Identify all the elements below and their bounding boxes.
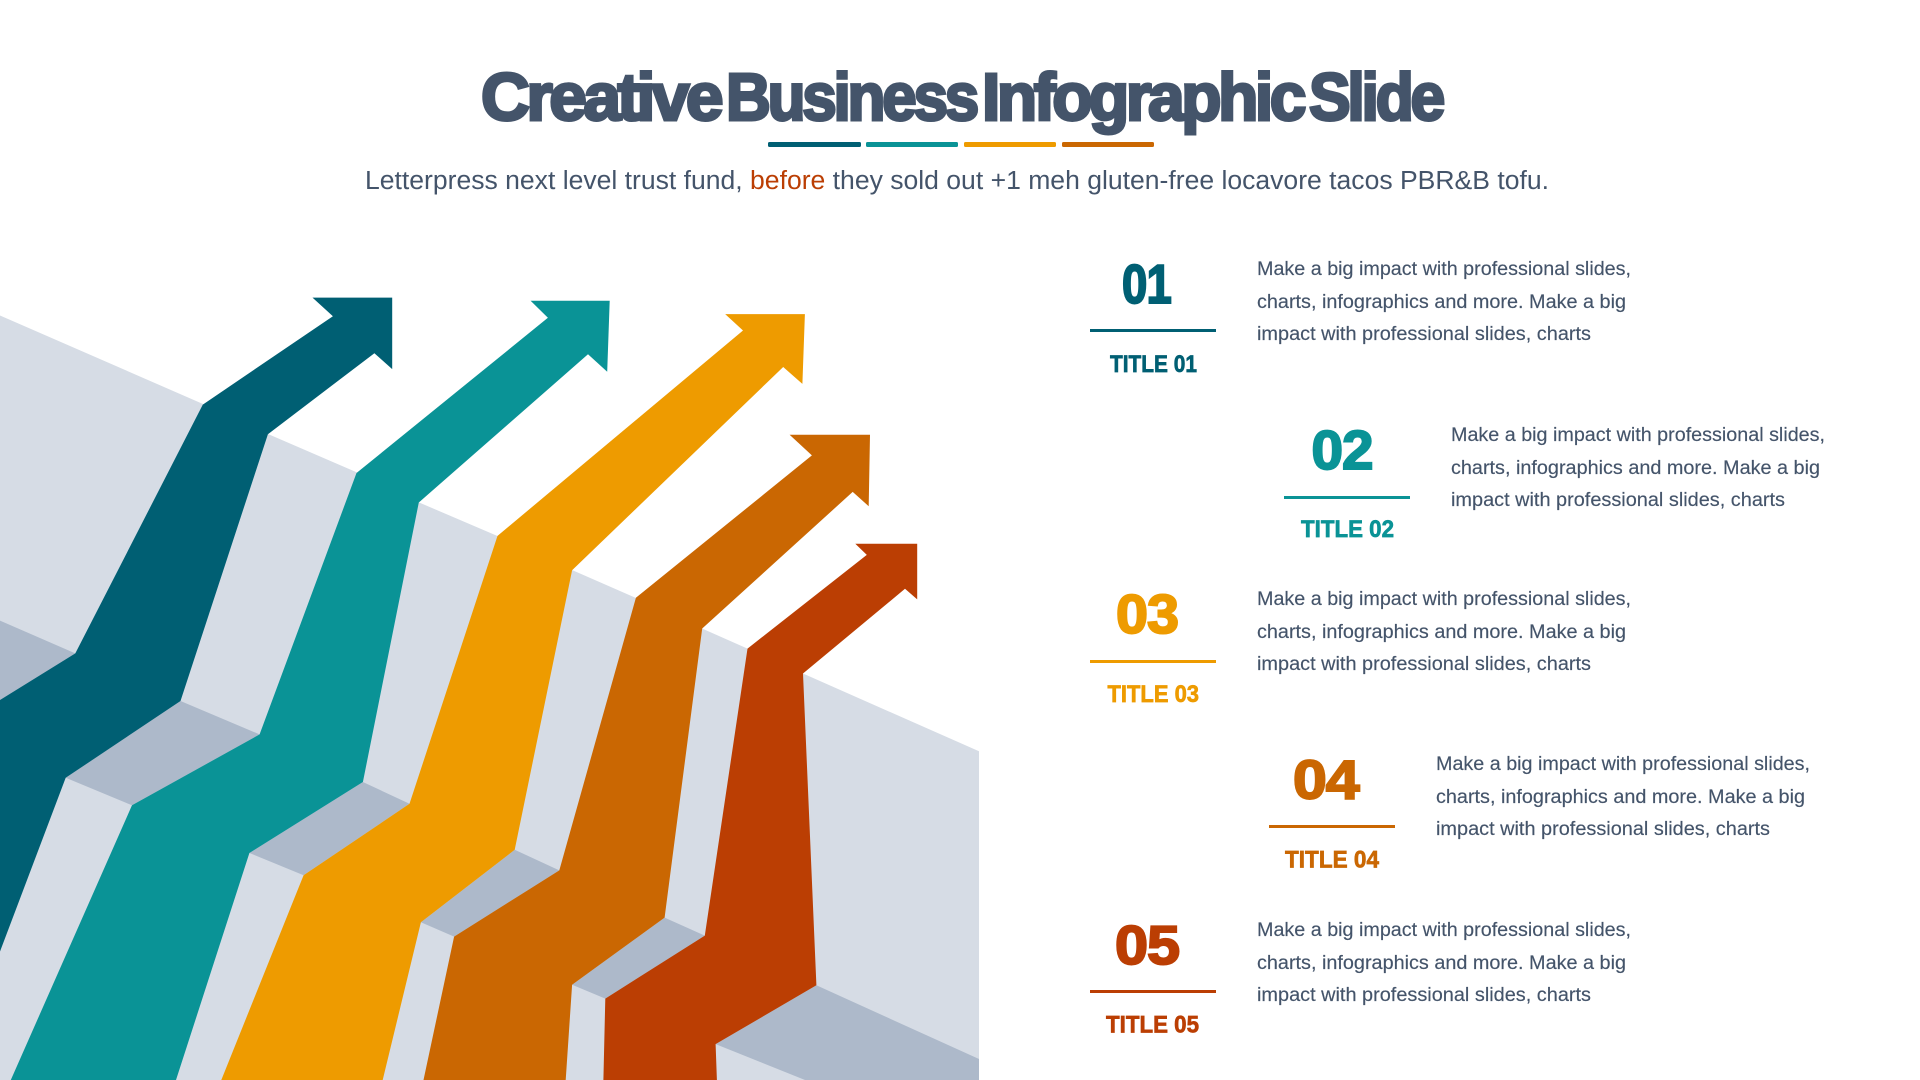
description 01: impact with professional slides, charts — [1257, 324, 1591, 345]
label 02: TITLE 02 — [1301, 516, 1394, 543]
number 01: 01 — [1122, 253, 1171, 315]
arrow 4 — [424, 435, 870, 1080]
description 04 — [1436, 754, 1810, 840]
description 04: charts, infographics and more. Make a big — [1436, 787, 1805, 808]
number 05: 05 — [1115, 914, 1179, 976]
label 04: TITLE 04 — [1285, 846, 1379, 874]
title: Creative — [481, 60, 721, 135]
arrow 5 — [603, 544, 917, 1080]
number 04: 04 — [1293, 748, 1360, 810]
description 01: Make a big impact with professional slides, — [1257, 259, 1631, 280]
description 04: Make a big impact with professional slides, — [1436, 754, 1810, 775]
divider 01 — [1090, 329, 1216, 332]
title: Infographic — [982, 60, 1305, 135]
stair treads — [0, 621, 979, 1080]
title — [481, 60, 1443, 135]
description 05 — [1257, 920, 1631, 1006]
label 01: TITLE 01 — [1110, 351, 1197, 378]
description 02: Make a big impact with professional slides, — [1451, 425, 1825, 446]
number 03: 03 — [1116, 583, 1178, 645]
arrow 2 — [11, 301, 610, 1080]
description 01: charts, infographics and more. Make a big — [1257, 292, 1626, 313]
divider 05 — [1090, 990, 1216, 993]
item 04 — [1269, 748, 1810, 874]
label 03: TITLE 03 — [1108, 681, 1199, 708]
label 05: TITLE 05 — [1106, 1012, 1199, 1038]
number 02: 02 — [1312, 419, 1372, 481]
item 03 — [1090, 583, 1631, 708]
description 01 — [1257, 259, 1631, 345]
item 01 — [1090, 253, 1631, 378]
divider 03 — [1090, 660, 1216, 663]
description 05: impact with professional slides, charts — [1257, 985, 1591, 1006]
title underline bars — [768, 142, 1154, 147]
title: Business — [726, 60, 977, 135]
description 02 — [1451, 425, 1825, 511]
description 04: impact with professional slides, charts — [1436, 819, 1770, 840]
description 03: Make a big impact with professional slides, — [1257, 589, 1631, 610]
stair wall — [0, 316, 979, 1080]
description 02: charts, infographics and more. Make a big — [1451, 458, 1820, 479]
divider 04 — [1269, 825, 1395, 828]
arrow 1 — [0, 298, 392, 952]
description 05: Make a big impact with professional slides, — [1257, 920, 1631, 941]
description 05: charts, infographics and more. Make a big — [1257, 953, 1626, 974]
description 03: impact with professional slides, charts — [1257, 654, 1591, 675]
title: Slide — [1309, 60, 1443, 135]
subtitle: Letterpress next level trust fund, before they sold out +1 meh gluten-free locavore tacos PBR&B tofu. — [365, 167, 1549, 195]
description 02: impact with professional slides, charts — [1451, 490, 1785, 511]
item 05 — [1090, 914, 1631, 1038]
arrow 3 — [221, 314, 805, 1080]
item 02 — [1284, 419, 1825, 543]
description 03: charts, infographics and more. Make a big — [1257, 622, 1626, 643]
staircase illustration — [0, 298, 979, 1080]
divider 02 — [1284, 496, 1410, 499]
description 03 — [1257, 589, 1631, 675]
